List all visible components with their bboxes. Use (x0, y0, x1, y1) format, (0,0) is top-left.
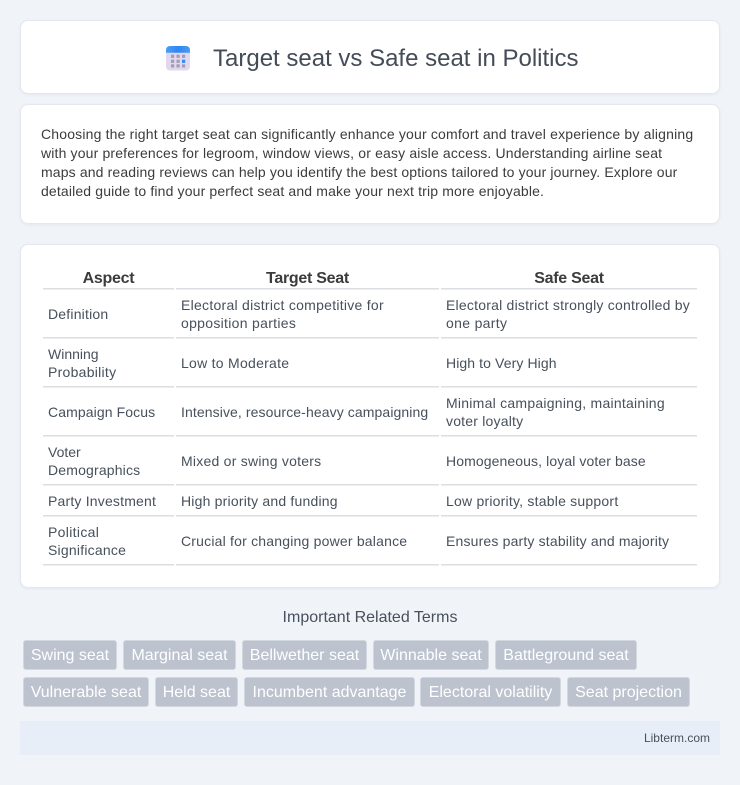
row: definition (48, 297, 690, 331)
text: Bellwether seat (250, 647, 359, 664)
text: one party (446, 315, 507, 331)
text: Electoral district competitive for (181, 297, 384, 313)
text: Crucial for changing power balance (181, 533, 407, 549)
comparison table panel (20, 244, 720, 588)
text: Held seat (163, 684, 230, 701)
text: Mixed or swing voters (181, 453, 321, 469)
text: Significance (48, 542, 126, 558)
intro text (41, 126, 693, 199)
text: Aspect (83, 270, 134, 287)
text: Definition (48, 306, 108, 322)
text: Safe Seat (534, 270, 604, 287)
text: Electoral district strongly controlled by (446, 297, 690, 313)
text: Winnable seat (380, 647, 482, 664)
intro panel (20, 104, 720, 224)
text: Voter (48, 444, 81, 460)
text: Electoral volatility (429, 684, 552, 701)
text: Party Investment (48, 493, 156, 509)
intro text: maps and reading reviews can help you identify the best options tailored to your journey. Explore our (41, 164, 677, 180)
footer (20, 721, 720, 755)
row: political significance (48, 524, 669, 558)
intro text: detailed guide to find your perfect seat and make your next trip more enjoyable. (41, 183, 544, 199)
text: Marginal seat (131, 647, 228, 664)
table headers (83, 270, 604, 287)
text: Battleground seat (503, 647, 629, 664)
footer source: Libterm.com (644, 731, 710, 745)
intro text: Choosing the right target seat can significantly enhance your comfort and travel experience by aligning (41, 126, 693, 142)
text: Vulnerable seat (31, 684, 141, 701)
text: Intensive, resource-heavy campaigning (181, 404, 428, 420)
icon: calendar (166, 46, 190, 70)
text: Homogeneous, loyal voter base (446, 453, 646, 469)
text: High to Very High (446, 355, 557, 371)
text: voter loyalty (446, 413, 523, 429)
text: Political (48, 524, 99, 540)
text: High priority and funding (181, 493, 338, 509)
text: opposition parties (181, 315, 296, 331)
text: Demographics (48, 462, 140, 478)
row: campaign focus (48, 395, 665, 429)
text: Probability (48, 364, 116, 380)
related term tags (23, 640, 690, 707)
text: Swing seat (31, 647, 109, 664)
row: party investment (48, 493, 618, 509)
text: Campaign Focus (48, 404, 155, 420)
intro text: with your preferences for legroom, window views, or easy aisle access. Understanding airline seat (41, 145, 662, 161)
title: Target seat vs Safe seat in Politics (213, 45, 579, 72)
text: Minimal campaigning, maintaining (446, 395, 665, 411)
row: voter demographics (48, 444, 646, 478)
table rules (43, 288, 697, 566)
related terms heading: Important Related Terms (283, 609, 457, 626)
row: winning probability (48, 346, 557, 380)
text: Ensures party stability and majority (446, 533, 669, 549)
text: Target Seat (266, 270, 349, 287)
text: Seat projection (575, 684, 682, 701)
text: Incumbent advantage (253, 684, 406, 701)
text: Winning (48, 346, 99, 362)
header card (20, 20, 720, 94)
text: Low to Moderate (181, 355, 289, 371)
text: Low priority, stable support (446, 493, 618, 509)
